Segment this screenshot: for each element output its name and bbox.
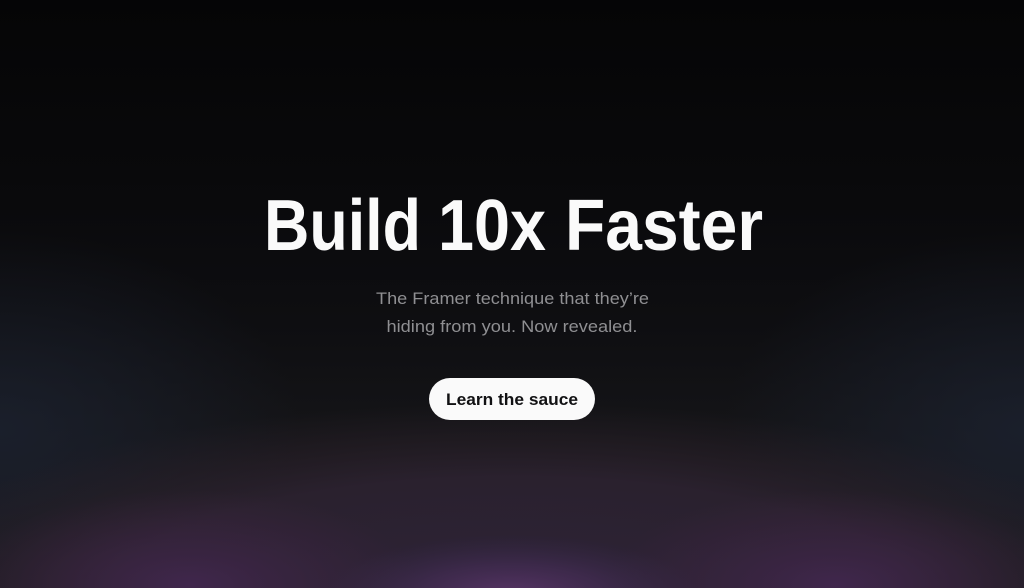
button: Learn the sauce [429,378,595,420]
title: Build [264,186,421,266]
button: Learn the sauce: Learn the sauce [446,390,578,409]
title [264,186,763,266]
title: Faster [565,186,763,266]
subtitle: hiding from you. Now revealed. [386,317,638,336]
subtitle: The Framer technique that they’re [376,289,649,308]
subtitle [376,289,649,336]
title: 10x [438,186,546,266]
